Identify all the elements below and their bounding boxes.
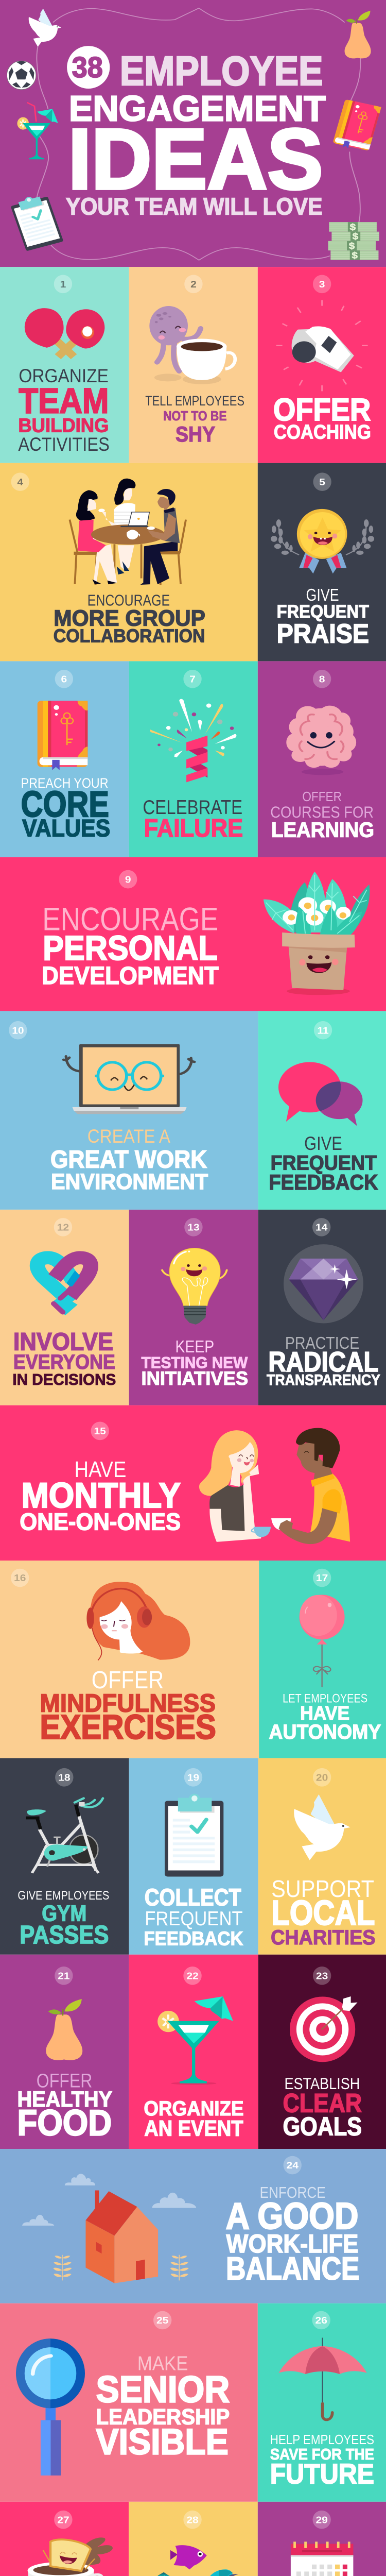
icon: light bulb bbox=[162, 1248, 227, 1325]
heading: offer mindfulness exercises bbox=[40, 1666, 216, 1747]
badge 7: 7 bbox=[189, 674, 196, 685]
heading: encourage more group collaboration: ENCOURAGE bbox=[87, 591, 170, 609]
heading: establish clear goals: CLEAR bbox=[283, 2088, 362, 2118]
heading: tell employees not to be shy bbox=[145, 394, 244, 447]
heading: offer mindfulness exercises: MINDFULNESS bbox=[40, 1689, 216, 1718]
icon: toast and coffee cup bbox=[28, 2537, 113, 2576]
heading: offer mindfulness exercises: EXERCISES bbox=[40, 1708, 216, 1747]
heading: collect frequent feedback: COLLECT bbox=[145, 1884, 241, 1911]
heading: encourage personal development: DEVELOPMENT bbox=[42, 962, 219, 990]
left woman bbox=[82, 524, 117, 583]
heading: celebrate failure: CELEBRATE bbox=[143, 796, 242, 819]
heading: offer healthy food: FOOD bbox=[17, 2103, 112, 2143]
heading: offer mindfulness exercises: OFFER bbox=[92, 1666, 164, 1694]
panel: 4 encourage more group collaboration bbox=[0, 463, 258, 661]
icon: cocktail bbox=[157, 1996, 233, 2085]
badge 12 bbox=[54, 1218, 72, 1236]
badge 4: 4 bbox=[17, 477, 23, 487]
heading: practice radical transparency: PRACTICE bbox=[285, 1333, 359, 1353]
heading: organize team building activities: ORGANIZE bbox=[19, 365, 109, 386]
icon: clipboard bbox=[9, 192, 63, 251]
right man bbox=[141, 541, 178, 585]
icon: clipboard bbox=[165, 1794, 223, 1877]
badge 11: 11 bbox=[317, 1026, 329, 1036]
panel: 19 collect frequent feedback bbox=[129, 1758, 258, 1955]
heading: offer courses for learning: OFFER bbox=[302, 789, 342, 804]
badge 6: 6 bbox=[61, 674, 67, 685]
badge 18: 18 bbox=[58, 1773, 71, 1783]
icon: magnifying glass bbox=[16, 2338, 85, 2476]
panel: 27 have fun bbox=[0, 2502, 129, 2576]
panel: 24 enforce a good work-life balance bbox=[0, 2149, 386, 2303]
heading: make senior leadership visible: SENIOR bbox=[96, 2369, 230, 2410]
heading: involve everyone in decisions: IN DECISIONS bbox=[12, 1370, 116, 1388]
icon: calendar bbox=[291, 2541, 353, 2576]
heading: collect frequent feedback: FEEDBACK bbox=[144, 1927, 243, 1950]
heading: organize an event: AN EVENT bbox=[144, 2116, 243, 2141]
badge 9: 9 bbox=[125, 875, 131, 885]
panel: 13 keep testing new initiatives bbox=[129, 1210, 258, 1405]
woman bbox=[199, 1430, 258, 1496]
panel: 25 make senior leadership visible bbox=[0, 2303, 258, 2502]
heading: encourage personal development: PERSONAL bbox=[43, 929, 218, 968]
heading: enforce a good work-life balance: ENFORCE bbox=[260, 2184, 326, 2201]
panel: 15 have monthly one-on-ones bbox=[0, 1405, 386, 1561]
badge 23: 23 bbox=[316, 1971, 328, 1981]
heading: give frequent praise: GIVE bbox=[306, 585, 339, 604]
heading: organize an event: ORGANIZE bbox=[144, 2097, 244, 2120]
illustration: woman and man having coffee bbox=[199, 1428, 350, 1544]
heading: organize an event bbox=[144, 2097, 244, 2141]
panel: 1 organize team building activities bbox=[0, 267, 129, 463]
heading: keep testing new initiatives: KEEP bbox=[176, 1336, 214, 1356]
icon: umbrella bbox=[278, 2337, 367, 2420]
icon: pear bbox=[345, 11, 371, 58]
heading: give employees gym passes bbox=[17, 1889, 109, 1949]
heading: give employees gym passes: GIVE EMPLOYEES bbox=[17, 1889, 109, 1902]
badge 19 bbox=[184, 1768, 202, 1787]
title: IDEAS bbox=[68, 112, 323, 207]
badge 19: 19 bbox=[187, 1773, 199, 1783]
badge 24 bbox=[284, 2156, 302, 2174]
badge 5 bbox=[313, 472, 331, 491]
heading: have monthly one-on-ones: HAVE bbox=[74, 1456, 126, 1482]
icon: speech bubbles bbox=[278, 1062, 363, 1126]
heading: create a great work environment bbox=[50, 1125, 208, 1194]
title: 38 bbox=[72, 51, 103, 83]
panel: 16 offer mindfulness exercises bbox=[0, 1561, 259, 1758]
panel: 20 support local charities bbox=[258, 1758, 386, 1955]
panel: 5 give frequent praise bbox=[258, 463, 386, 661]
badge 10: 10 bbox=[12, 1026, 24, 1036]
icon: octopus and coffee bbox=[149, 306, 235, 384]
panel: 23 establish clear goals bbox=[258, 1955, 386, 2149]
heading: encourage personal development bbox=[42, 901, 219, 990]
icon: book bbox=[332, 99, 381, 153]
heading: have monthly one-on-ones bbox=[20, 1456, 181, 1535]
badge 22: 22 bbox=[186, 1971, 199, 1981]
heading: help employees save for the future bbox=[270, 2432, 374, 2490]
heading: offer healthy food: HEALTHY bbox=[17, 2087, 112, 2111]
badge 3: 3 bbox=[319, 279, 325, 290]
heading: give employees gym passes: PASSES bbox=[20, 1921, 109, 1949]
title: YOUR TEAM WILL LOVE bbox=[66, 193, 323, 220]
icon: smiling plant pot bbox=[264, 872, 370, 995]
heading: enforce a good work-life balance bbox=[226, 2184, 359, 2287]
title: ENGAGEMENT bbox=[69, 89, 326, 128]
badge 29: 29 bbox=[315, 2515, 328, 2526]
panel: 29 survey employees frequently bbox=[258, 2502, 386, 2576]
badge 29 bbox=[312, 2511, 331, 2529]
badge 10 bbox=[9, 1021, 27, 1040]
icon: money bbox=[328, 222, 379, 261]
badge 17 bbox=[313, 1569, 331, 1587]
panel: 2 tell employees not to be shy bbox=[129, 267, 258, 463]
badge 5: 5 bbox=[319, 477, 325, 487]
badge 25: 25 bbox=[156, 2315, 168, 2326]
heading: keep testing new initiatives bbox=[142, 1336, 248, 1389]
icon: cocktail bbox=[17, 103, 58, 159]
heading: give frequent praise bbox=[277, 585, 369, 649]
icon: whistle bbox=[276, 300, 368, 391]
badge 14: 14 bbox=[315, 1223, 327, 1233]
heading: encourage personal development: ENCOURAGE bbox=[42, 901, 218, 938]
panel: 3 offer coaching bbox=[258, 267, 386, 463]
heading: collect frequent feedback bbox=[144, 1884, 243, 1950]
heading: tell employees not to be shy: SHY bbox=[176, 422, 215, 447]
heading: establish clear goals: GOALS bbox=[283, 2112, 362, 2141]
heading: make senior leadership visible: VISIBLE bbox=[96, 2421, 229, 2462]
heading: create a great work environment: ENVIRONMENT bbox=[51, 1169, 208, 1194]
badge 1: 1 bbox=[60, 279, 66, 290]
icon: confetti party popper bbox=[150, 699, 236, 782]
panel: 22 organize an event bbox=[129, 1955, 258, 2149]
heading: celebrate failure: FAILURE bbox=[144, 815, 243, 842]
heading: make senior leadership visible bbox=[96, 2352, 230, 2462]
heading: tell employees not to be shy: TELL EMPLOYEES bbox=[145, 394, 244, 409]
panel: 14 practice radical transparency bbox=[258, 1210, 386, 1405]
panel: 9 encourage personal development bbox=[0, 857, 386, 1011]
panel: 6 preach your core values bbox=[0, 661, 129, 857]
badge 24: 24 bbox=[287, 2160, 299, 2171]
panel: 26 help employees save for the future bbox=[258, 2303, 386, 2502]
man bbox=[271, 1518, 291, 1530]
panel: 21 offer healthy food bbox=[0, 1955, 129, 2149]
heading: establish clear goals: ESTABLISH bbox=[284, 2075, 360, 2093]
heading: make senior leadership visible: LEADERSHIP bbox=[96, 2404, 230, 2429]
badge 28 bbox=[183, 2511, 202, 2529]
badge 13 bbox=[184, 1218, 203, 1236]
badge 4 bbox=[11, 472, 29, 491]
heading: tell employees not to be shy: NOT TO BE bbox=[163, 409, 227, 423]
heading: give frequent feedback: GIVE bbox=[304, 1133, 342, 1154]
heading: preach your core values: PREACH YOUR bbox=[21, 776, 108, 791]
badge 3 bbox=[313, 275, 331, 293]
illustration: woman with headphones bbox=[86, 1582, 190, 1660]
heading: create a great work environment: GREAT WORK bbox=[50, 1146, 207, 1174]
icon: diamond bbox=[284, 1244, 363, 1323]
icon: medal with wreath bbox=[271, 509, 374, 573]
panel: 28 hire for culture fit bbox=[129, 2502, 258, 2576]
badge 16: 16 bbox=[14, 1573, 26, 1584]
heading: create a great work environment: CREATE A bbox=[87, 1125, 170, 1147]
panel: 17 let employees have autonomy bbox=[259, 1561, 386, 1758]
badge 9 bbox=[119, 870, 137, 888]
heading: establish clear goals bbox=[283, 2075, 362, 2141]
icon: laptop with glasses bbox=[63, 1044, 195, 1114]
heading: give employees gym passes: GYM bbox=[42, 1900, 86, 1926]
badge 16 bbox=[11, 1569, 29, 1587]
badge 28: 28 bbox=[186, 2515, 199, 2526]
heading: preach your core values: VALUES bbox=[22, 814, 110, 841]
heading: involve everyone in decisions: EVERYONE bbox=[13, 1351, 115, 1374]
heading: encourage more group collaboration bbox=[54, 591, 205, 647]
heading: involve everyone in decisions: INVOLVE bbox=[13, 1328, 113, 1356]
heading: preach your core values bbox=[21, 776, 110, 841]
badge 2: 2 bbox=[190, 279, 197, 290]
heading: have monthly one-on-ones: ONE-ON-ONES bbox=[20, 1509, 181, 1535]
heading: have monthly one-on-ones: MONTHLY bbox=[22, 1476, 181, 1515]
icon: dove bbox=[29, 9, 61, 47]
badge 20 bbox=[313, 1768, 331, 1787]
panel: 18 give employees gym passes bbox=[0, 1758, 129, 1955]
heading: preach your core values: CORE bbox=[21, 784, 109, 825]
heading: offer coaching bbox=[273, 392, 371, 443]
heading: let employees have autonomy: HAVE bbox=[300, 1702, 349, 1724]
badge 20: 20 bbox=[316, 1773, 328, 1783]
badge 26: 26 bbox=[315, 2315, 327, 2326]
illustration: house with clouds and wheat bbox=[22, 2174, 196, 2283]
heading: organize team building activities: TEAM bbox=[19, 381, 109, 421]
panel: 10 create a great work environment bbox=[0, 1011, 258, 1210]
badge 27 bbox=[54, 2511, 73, 2529]
heading: keep testing new initiatives: TESTING NEW bbox=[142, 1354, 248, 1372]
heading: organize team building activities: BUILDING bbox=[18, 414, 109, 436]
illustration: three people at a table bbox=[69, 479, 186, 585]
icon: exercise bike bbox=[26, 1798, 103, 1873]
icon: brain bbox=[286, 706, 356, 775]
panel: 11 give frequent feedback bbox=[258, 1011, 386, 1210]
heading: collect frequent feedback: FREQUENT bbox=[145, 1907, 243, 1929]
icon: three fish bbox=[143, 2545, 238, 2576]
heading: let employees have autonomy bbox=[269, 1692, 381, 1743]
heading: make senior leadership visible: MAKE bbox=[137, 2352, 188, 2375]
panel: 7 celebrate failure bbox=[129, 661, 258, 857]
icon: dove bbox=[294, 1794, 350, 1860]
badge 15 bbox=[91, 1422, 109, 1440]
badge 27: 27 bbox=[57, 2515, 69, 2526]
table bbox=[91, 524, 165, 545]
heading: support local charities bbox=[271, 1875, 375, 1949]
badge 17: 17 bbox=[316, 1573, 328, 1584]
badge 14 bbox=[312, 1218, 330, 1236]
badge 15: 15 bbox=[94, 1426, 106, 1437]
heading: practice radical transparency bbox=[267, 1333, 380, 1388]
panel: header bbox=[0, 0, 386, 267]
heading: give frequent feedback bbox=[269, 1133, 378, 1194]
heading: organize team building activities bbox=[18, 365, 110, 455]
heading: involve everyone in decisions bbox=[12, 1328, 116, 1388]
heading: encourage more group collaboration: COLLABORATION bbox=[54, 626, 205, 647]
badge 11 bbox=[314, 1021, 332, 1040]
badge 1 bbox=[54, 275, 72, 293]
badge 6 bbox=[55, 670, 73, 688]
icon: pear bbox=[46, 1999, 82, 2060]
badge 8: 8 bbox=[319, 674, 325, 685]
badge 21: 21 bbox=[58, 1971, 70, 1981]
icon: ping pong paddles bbox=[25, 308, 104, 357]
icon: book with key bbox=[38, 701, 87, 770]
heading: organize team building activities: ACTIVITIES bbox=[18, 434, 110, 455]
panel: 8 offer courses for learning bbox=[258, 661, 386, 857]
heading: offer courses for learning bbox=[270, 789, 374, 842]
title: EMPLOYEE bbox=[120, 48, 323, 94]
icon: balloon bbox=[300, 1595, 345, 1687]
heading: celebrate failure bbox=[143, 796, 243, 842]
badge 13: 13 bbox=[187, 1223, 200, 1233]
middle woman bbox=[118, 484, 134, 570]
badge 7 bbox=[183, 670, 202, 688]
heading: offer healthy food: OFFER bbox=[37, 2070, 92, 2092]
badge 8 bbox=[313, 670, 331, 688]
badge 2 bbox=[184, 275, 203, 293]
icon: heart of joined hands bbox=[38, 1258, 91, 1315]
panel: 12 involve everyone in decisions bbox=[0, 1210, 129, 1405]
title bbox=[66, 46, 326, 220]
heading: encourage more group collaboration: MORE GROUP bbox=[54, 606, 205, 631]
icon: soccer ball bbox=[7, 61, 36, 90]
heading: keep testing new initiatives: INITIATIVES bbox=[142, 1367, 248, 1389]
heading: offer healthy food bbox=[17, 2070, 112, 2143]
badge 18 bbox=[55, 1768, 74, 1787]
badge 12: 12 bbox=[57, 1223, 69, 1233]
icon: target with arrow bbox=[290, 1996, 358, 2062]
